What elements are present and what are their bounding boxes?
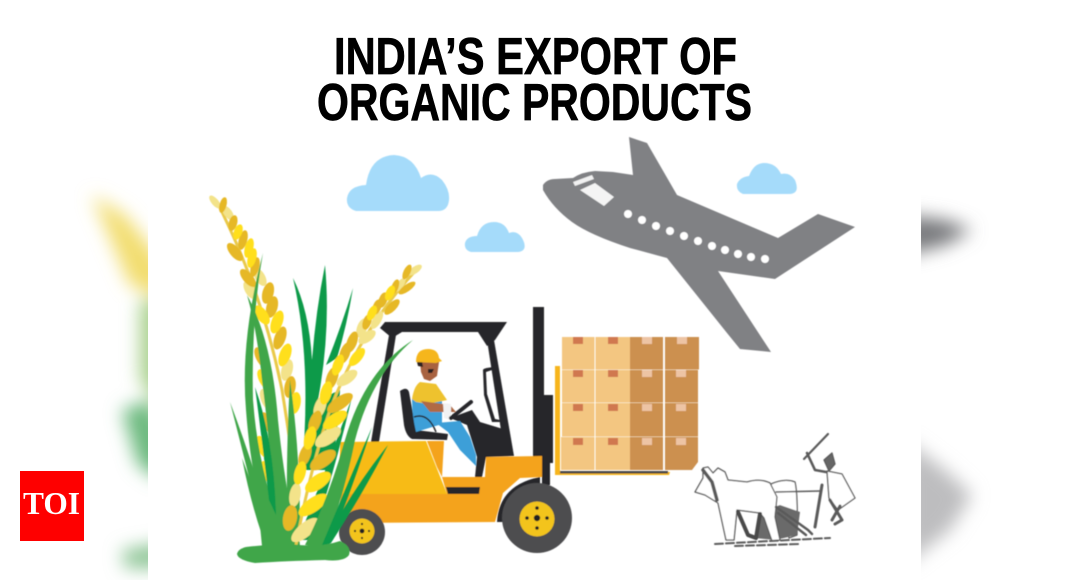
grass base mound [237,541,350,563]
dark green inner leaf [255,387,276,515]
stacked cardboard boxes on pallet [555,337,699,475]
blurred background edges [92,195,972,568]
forklift mast [533,307,553,485]
title: ORGANIC PRODUCTS [317,74,752,132]
front grass leaves [305,340,413,548]
TOI logo [20,471,84,541]
forklift body [340,456,542,523]
title: INDIA’S EXPORT OF [334,28,737,86]
ox plough line drawing [695,434,855,546]
airplane [543,137,855,352]
dark green back leaves [293,265,353,540]
right wheat ear [281,263,424,546]
front wheel [497,477,572,553]
title [317,28,752,132]
forklift driver [412,349,476,466]
icon: large cloud [347,155,449,211]
TOI logo: TOI [23,485,80,521]
forklift console [450,410,514,477]
forklift cab frame [371,322,514,456]
forklift [339,307,572,555]
rear wheel [339,509,385,555]
left wheat ear [207,194,302,530]
wheat and grass plant [207,194,424,563]
icon: right cloud [737,163,797,194]
light green left leaves [230,253,300,546]
icon: small cloud [465,222,525,252]
driver seat [400,389,448,440]
